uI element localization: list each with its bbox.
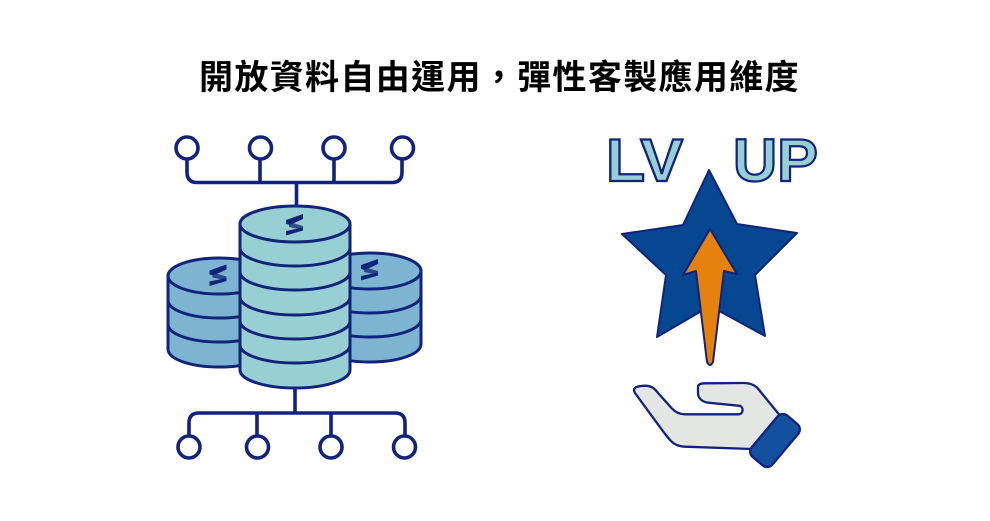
icon: upward arrow <box>683 229 737 365</box>
icon: left database cylinder <box>168 258 270 367</box>
icon: cuff <box>747 411 803 470</box>
icon: top network connector <box>176 137 414 207</box>
icon: hand <box>634 383 782 449</box>
icon: bottom network connector <box>178 388 416 458</box>
icon: centre logo mark <box>286 214 303 236</box>
heading: UP: UP <box>733 127 818 194</box>
icon: right database cylinder <box>319 253 421 362</box>
icon: right logo mark <box>361 259 378 280</box>
heading: LV: LV <box>606 127 683 194</box>
title: 開放資料自由運用，彈性客製應用維度 <box>199 59 800 97</box>
icon: open hand with cuff <box>634 383 803 470</box>
icon: star <box>622 170 797 337</box>
icon: left logo mark <box>210 264 226 286</box>
icon: centre database cylinder <box>240 206 350 388</box>
